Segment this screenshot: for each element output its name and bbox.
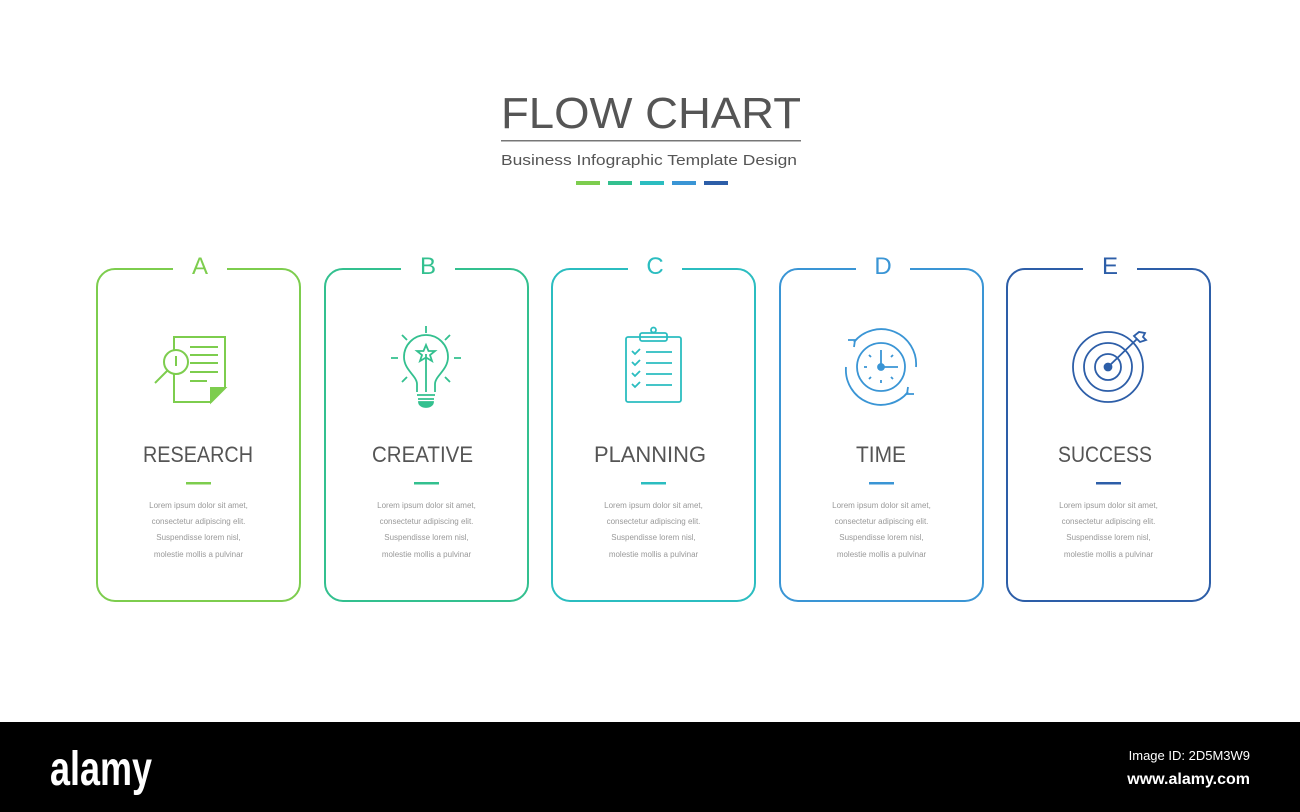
body text: molestie mollis a pulvinar [154,550,244,559]
body text: Suspendisse lorem nisl, [611,533,696,542]
body text [1059,501,1158,559]
panel: A research [97,253,300,601]
body text: molestie mollis a pulvinar [837,550,927,559]
panel: C planning [552,253,755,601]
panel: A research: A [192,253,208,280]
color dashes [576,181,728,185]
body text: molestie mollis a pulvinar [1064,550,1154,559]
body text: molestie mollis a pulvinar [382,550,472,559]
heading: RESEARCH [143,442,253,467]
footer bar [0,722,1300,812]
heading: CREATIVE [372,442,473,467]
body text: Suspendisse lorem nisl, [839,533,924,542]
panel: E success: E [1102,253,1118,280]
panel: C planning: C [646,253,664,280]
body text: Lorem ipsum dolor sit amet, [149,501,248,510]
icon: light bulb [391,326,461,407]
icon: document search [155,337,225,402]
body text: Lorem ipsum dolor sit amet, [1059,501,1158,510]
body text: consectetur adipiscing elit. [380,517,473,526]
body text: Lorem ipsum dolor sit amet, [604,501,703,510]
icon: target [1073,332,1146,402]
heading: SUCCESS [1058,442,1152,467]
body text [832,501,931,559]
body text [604,501,703,559]
body text: consectetur adipiscing elit. [152,517,245,526]
body text: consectetur adipiscing elit. [607,517,700,526]
body text: consectetur adipiscing elit. [835,517,928,526]
panel: B creative [325,253,528,601]
body text: consectetur adipiscing elit. [1062,517,1155,526]
title: FLOW CHART [501,89,801,138]
panel: D time [780,253,983,601]
body text: Suspendisse lorem nisl, [1066,533,1151,542]
heading: TIME [856,442,906,467]
panel: E success [1007,253,1210,601]
icon: clipboard checklist [626,328,681,402]
body text: molestie mollis a pulvinar [609,550,699,559]
footer bar: alamy [50,743,152,796]
footer bar: www.alamy.com [1126,771,1250,788]
panel: B creative: B [420,253,436,280]
body text: Suspendisse lorem nisl, [156,533,241,542]
body text: Suspendisse lorem nisl, [384,533,469,542]
body text: Lorem ipsum dolor sit amet, [377,501,476,510]
icon: clock with arrows [846,329,916,405]
panel: D time: D [874,253,892,280]
body text: Lorem ipsum dolor sit amet, [832,501,931,510]
footer bar: Image ID: 2D5M3W9 [1129,748,1250,763]
subtitle: Business Infographic Template Design [501,152,797,169]
body text [377,501,476,559]
body text [149,501,248,559]
heading: PLANNING [594,442,706,467]
